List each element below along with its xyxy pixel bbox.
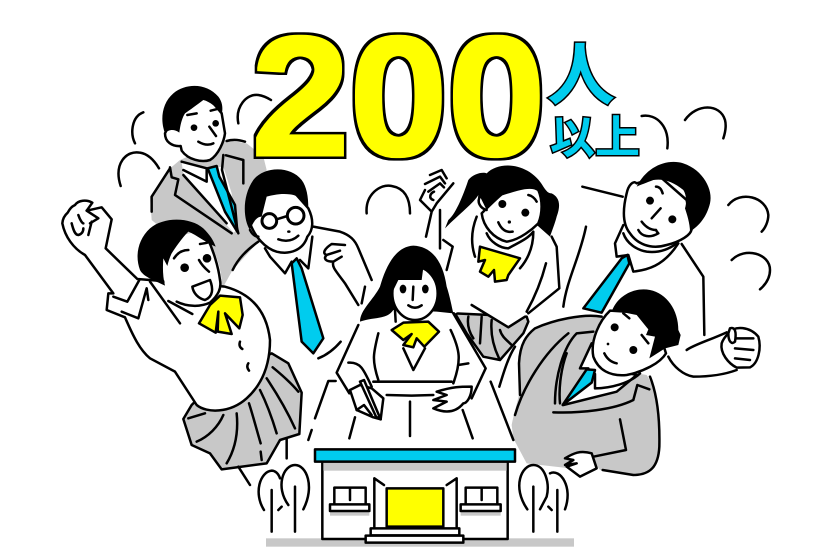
skirt xyxy=(183,353,302,469)
school building with trees xyxy=(259,449,574,547)
building body xyxy=(322,462,508,539)
hair xyxy=(360,246,453,322)
heading: 200: 200 xyxy=(252,2,546,192)
hair xyxy=(445,166,559,237)
roof xyxy=(315,449,515,462)
skirt pleats xyxy=(188,367,298,485)
desk top xyxy=(308,381,515,443)
torso and arm xyxy=(62,201,270,411)
student: boy with glasses and blue tie xyxy=(223,169,372,358)
blouse xyxy=(336,313,486,398)
blouse xyxy=(443,223,559,327)
student: cheering girl with raised fist, left xyxy=(62,201,302,485)
student: girl with ponytails, upper right xyxy=(420,166,623,360)
right hand xyxy=(433,387,472,411)
hair xyxy=(138,220,216,286)
yellow bow xyxy=(478,247,520,282)
fist xyxy=(721,328,760,368)
shirt and tie xyxy=(563,343,637,405)
ground xyxy=(266,538,574,547)
yellow bow xyxy=(199,296,243,334)
face xyxy=(163,230,222,306)
yellow bow xyxy=(392,322,439,347)
hair xyxy=(612,289,681,358)
trees left xyxy=(259,471,295,532)
student: boy in grey blazer, foreground right xyxy=(499,289,681,477)
face xyxy=(482,188,542,242)
door xyxy=(387,488,443,527)
student: boy in grey blazer, top left xyxy=(119,86,271,288)
desk and central girl writing xyxy=(308,246,515,443)
hair xyxy=(637,162,711,232)
motion arcs xyxy=(367,107,770,289)
left hand with pencil xyxy=(350,385,383,419)
heading: 以上: 以上 xyxy=(550,112,640,163)
heading: 人: 人 xyxy=(547,38,615,114)
student: boy with raised fist, right xyxy=(583,162,760,377)
right window xyxy=(461,512,501,516)
skirt xyxy=(455,313,528,360)
trees right xyxy=(519,465,568,532)
steps xyxy=(371,528,459,535)
left window xyxy=(330,512,369,516)
raised hand xyxy=(420,170,453,237)
